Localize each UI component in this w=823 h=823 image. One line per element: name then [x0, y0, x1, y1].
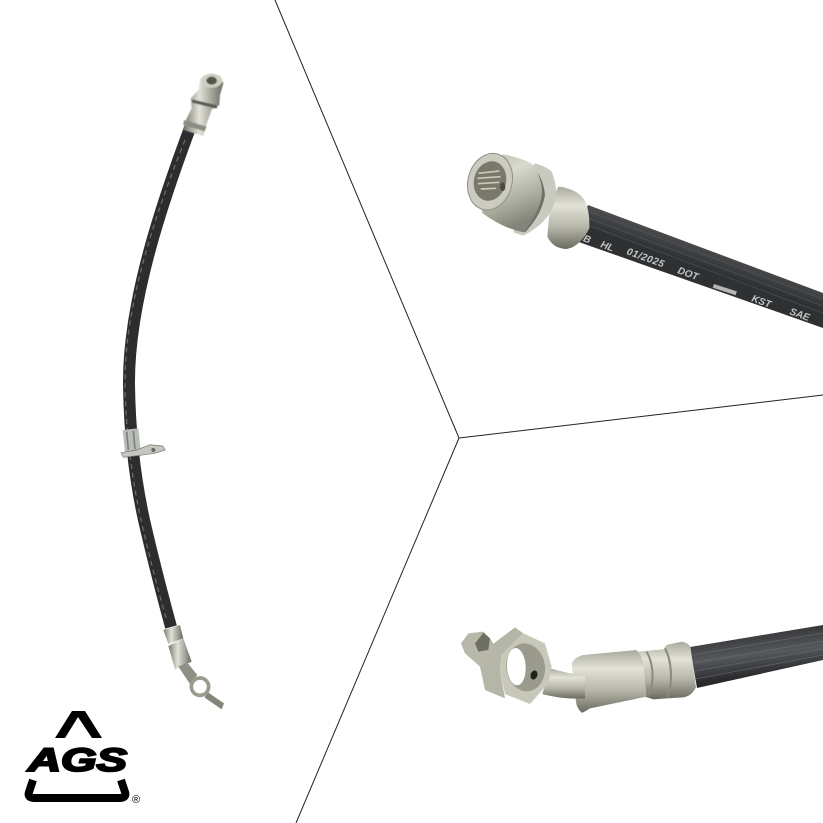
hose printing: 01/2025 [625, 246, 666, 270]
hose segment [690, 625, 823, 688]
end face [461, 148, 519, 215]
hex rear edge [480, 627, 523, 698]
hose body [125, 128, 190, 627]
through hole [506, 648, 527, 686]
hose printing: KST [750, 293, 773, 311]
hose ribs [692, 633, 823, 679]
bore recess [503, 641, 548, 694]
hose printing: HL [599, 239, 615, 254]
full brake hose view [121, 74, 224, 709]
close-up: banjo fitting and hose [461, 625, 823, 713]
hose printing [578, 232, 811, 324]
top fitting [183, 74, 223, 136]
AGS logo [27, 711, 140, 806]
hose printing: SAE [788, 306, 811, 324]
rear collar [513, 163, 556, 236]
side port [529, 669, 539, 681]
metal fitting [461, 148, 589, 249]
nut body [473, 154, 542, 232]
hex face [500, 633, 552, 704]
divider lines [275, 0, 823, 823]
ferrule [572, 650, 647, 713]
mounting clamp [121, 428, 165, 457]
crimp ferrule [547, 187, 589, 249]
registered mark: ® [132, 794, 140, 806]
crimp collar [637, 642, 696, 699]
hose ribs [585, 212, 823, 313]
logo wordmark: AGS [27, 742, 128, 778]
side port [500, 182, 505, 191]
logo bottom bracket [29, 780, 125, 798]
close-up: threaded fitting and hose [461, 148, 823, 328]
dark groove [520, 166, 545, 232]
hose printing: DOT [676, 265, 700, 283]
wing tab [461, 632, 494, 667]
banjo head [461, 627, 585, 704]
threaded bore [469, 158, 511, 204]
crimp and ferrule [572, 642, 696, 713]
bottom banjo fitting [163, 625, 224, 709]
hose segment [573, 205, 823, 328]
banjo tube [542, 668, 585, 699]
logo top chevron [55, 711, 102, 738]
hose printing: /B [578, 232, 592, 246]
